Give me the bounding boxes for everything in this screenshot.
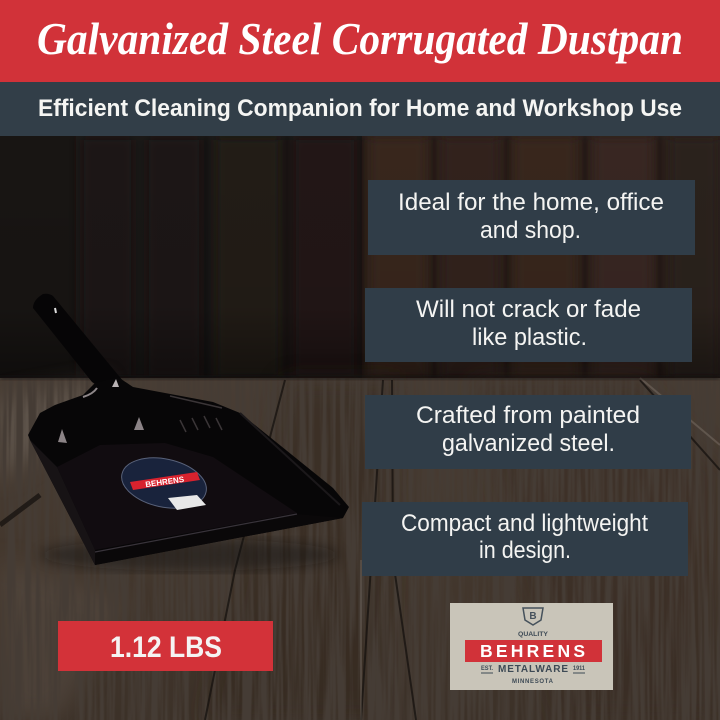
title banner xyxy=(0,0,720,82)
subtitle text: Efficient Cleaning Companion for Home and Workshop Use xyxy=(38,95,682,122)
dustpan product image xyxy=(28,294,349,565)
logo emblem xyxy=(523,608,543,625)
feature box: durability: like plastic. xyxy=(472,324,587,351)
logo wordmark xyxy=(465,632,602,685)
dustpan handle xyxy=(33,294,128,395)
logo wordmark: BEHRENS xyxy=(480,641,585,661)
product label xyxy=(117,451,211,515)
feature box: compact design xyxy=(362,502,688,576)
subtitle banner xyxy=(0,82,720,136)
dustpan body xyxy=(28,377,349,565)
feature box: compact design: in design. xyxy=(479,537,571,564)
weight badge xyxy=(58,621,273,671)
feature box: material: Crafted from painted xyxy=(416,402,640,429)
product label: BEHRENS xyxy=(145,475,185,489)
feature box: ideal use: and shop. xyxy=(480,217,581,244)
logo wordmark: EST. xyxy=(481,666,493,672)
feature box: material xyxy=(365,395,691,469)
logo emblem: B xyxy=(529,611,537,622)
logo wordmark: MINNESOTA xyxy=(512,679,554,685)
feature box: ideal use xyxy=(368,180,695,255)
weight text: 1.12 LBS xyxy=(110,631,222,664)
feature box: compact design: Compact and lightweight xyxy=(401,510,648,537)
feature box: material: galvanized steel. xyxy=(442,430,615,457)
logo wordmark: METALWARE xyxy=(498,664,568,675)
feature box: durability xyxy=(365,288,692,362)
feature box: ideal use: Ideal for the home, office xyxy=(398,189,664,216)
Behrens logo xyxy=(450,603,613,690)
logo wordmark: 1911 xyxy=(573,666,586,672)
dustpan interior and rim highlights xyxy=(30,308,343,565)
logo wordmark: QUALITY xyxy=(518,632,548,638)
feature box: durability: Will not crack or fade xyxy=(416,296,641,323)
